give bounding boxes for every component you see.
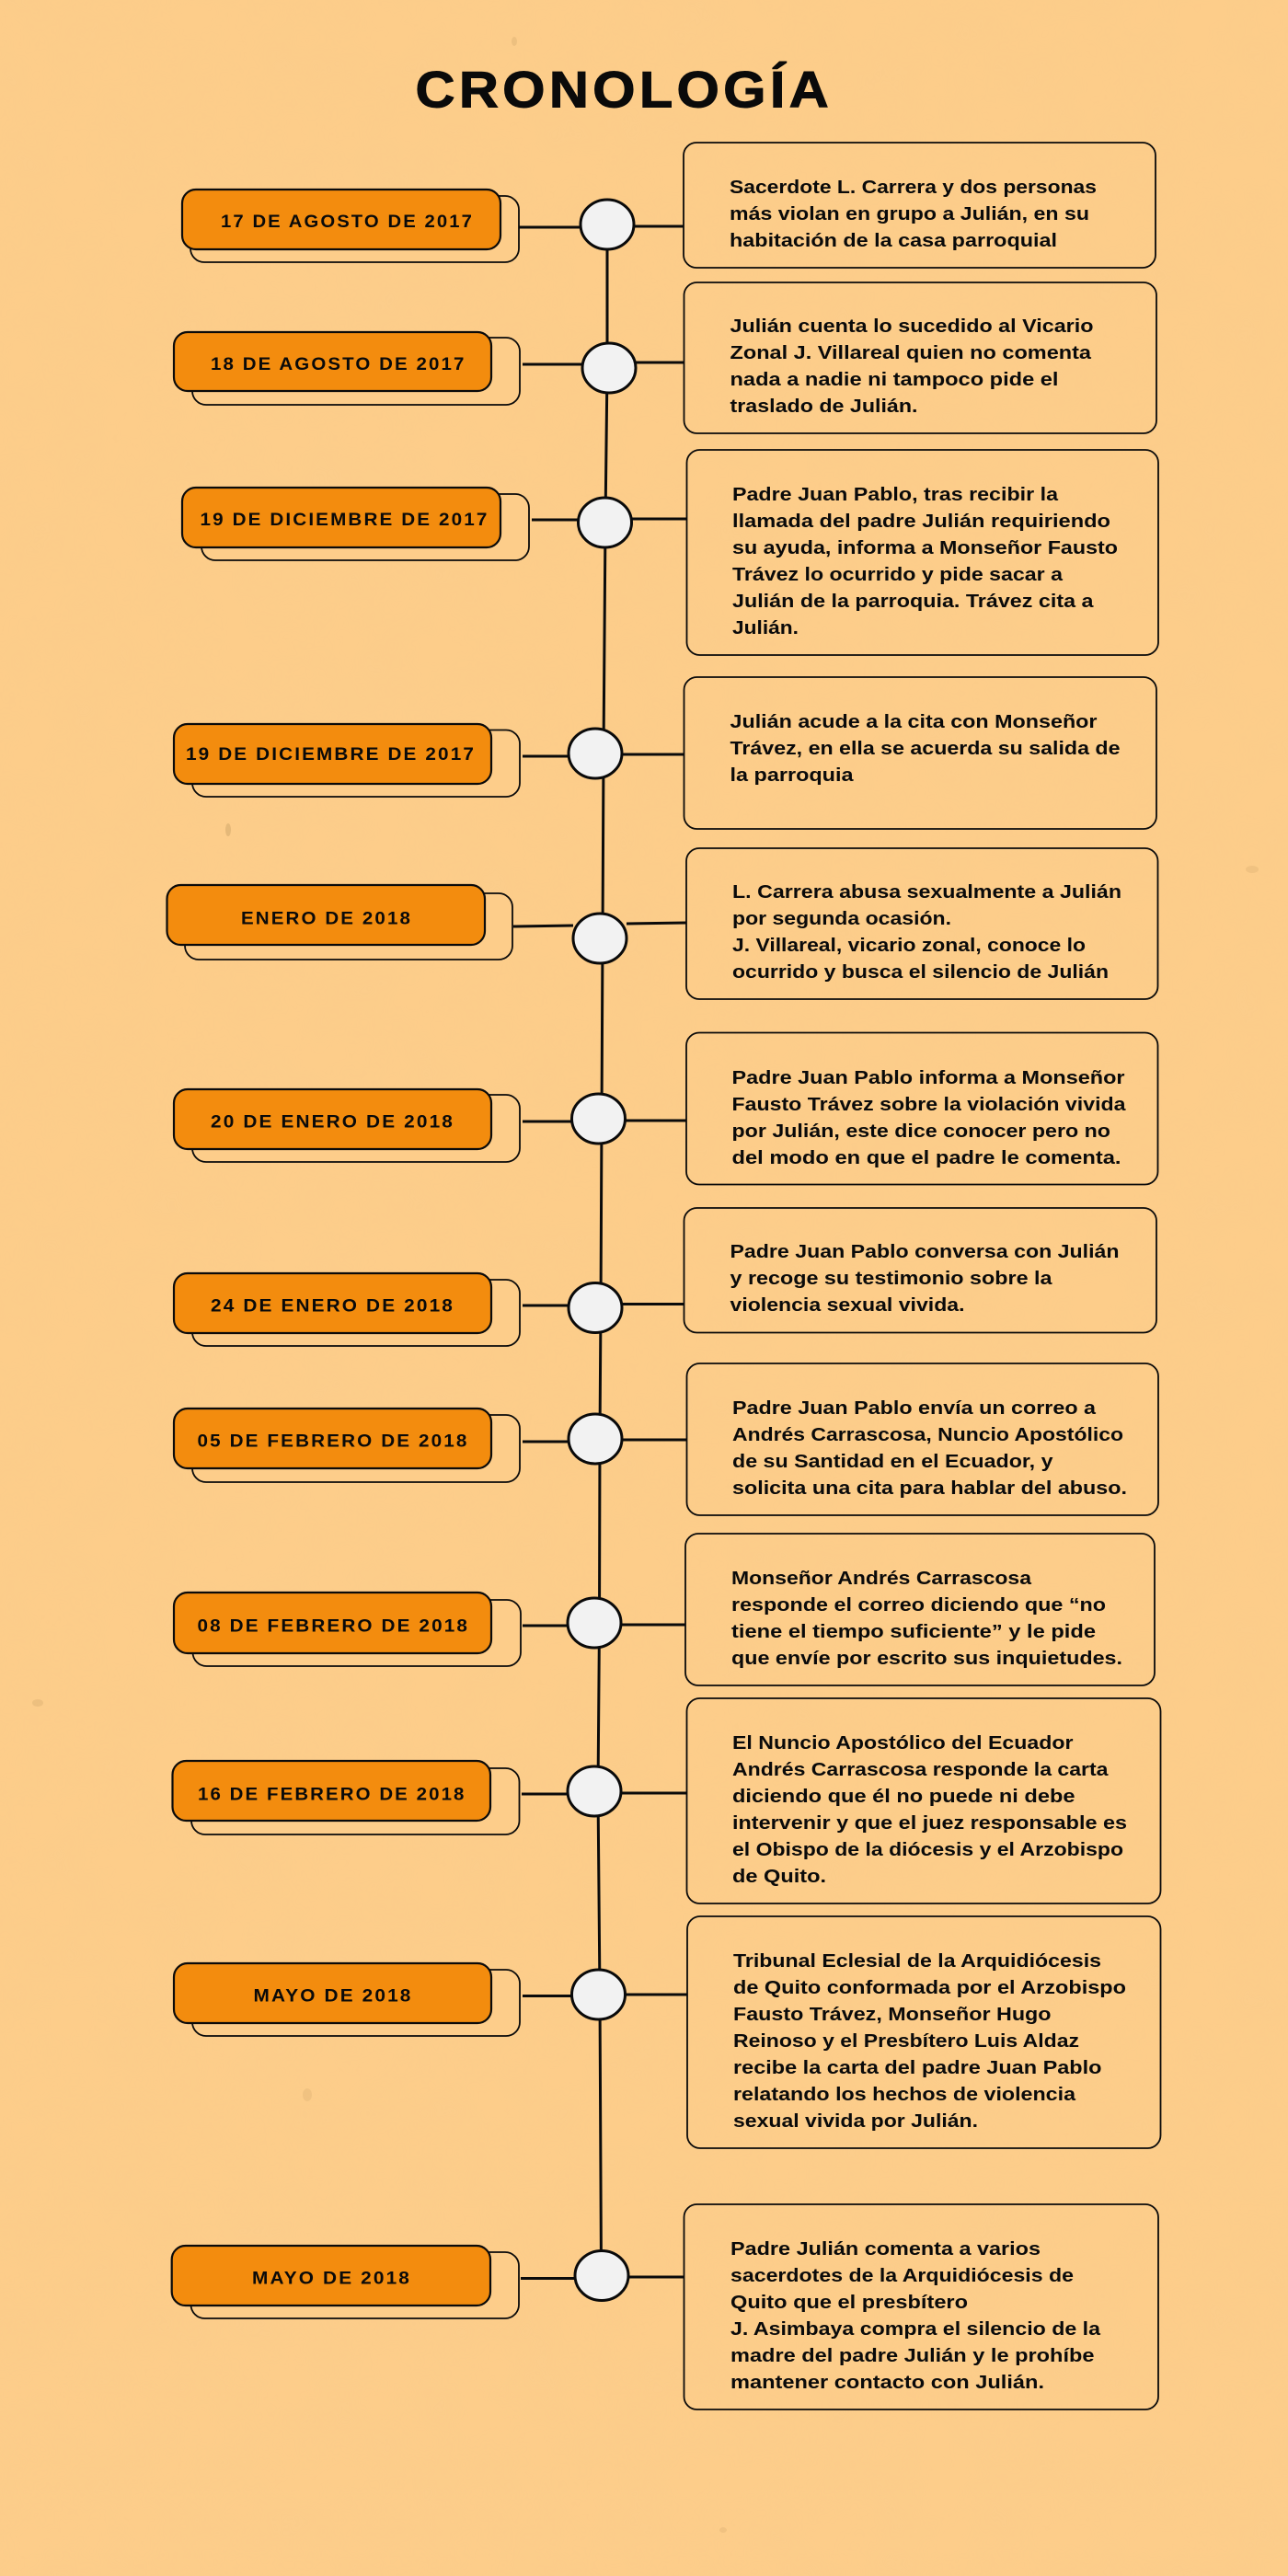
event text box: Sacerdote L. Carrera y dos personas [730,177,1097,198]
connectors [513,923,686,926]
event 9 [174,1534,1155,1685]
event text box: sexual vivida por Julián. [733,2110,978,2132]
connectors [519,226,684,227]
event text box: que envíe por escrito sus inquietudes. [731,1648,1122,1669]
event text box [684,143,1156,268]
event text box: y recoge su testimonio sobre la [730,1268,1052,1289]
date tag: 08 de febrero de 2018 [174,1593,521,1666]
node [582,343,636,393]
connectors [523,362,684,364]
event text box [684,1208,1156,1332]
event text box [686,1032,1157,1185]
connectors [523,1625,685,1626]
event 2 [174,282,1156,433]
event text box: Padre Juan Pablo, tras recibir la [732,484,1059,505]
event text box: Julián acude a la cita con Monseñor [730,711,1098,732]
event text box: más violan en grupo a Julián, en su [730,203,1089,224]
event text box: responde el correo diciendo que “no [731,1594,1106,1616]
event text box [684,282,1156,433]
event 10 [173,1698,1161,1903]
event text box: Monseñor Andrés Carrascosa [731,1568,1032,1589]
event text box: de Quito conformada por el Arzobispo [733,1977,1126,1998]
event text box [686,1363,1158,1515]
event text box: Padre Julián comenta a varios [730,2238,1041,2260]
event text box [684,677,1156,829]
event text box: llamada del padre Julián requiriendo [732,511,1110,532]
event text box: Padre Juan Pablo envía un correo a [732,1397,1097,1419]
event 3 [182,450,1158,655]
event text box: de Quito. [732,1866,826,1887]
event text box: su ayuda, informa a Monseñor Fausto [732,537,1118,558]
event text box: El Nuncio Apostólico del Ecuador [732,1732,1074,1754]
event text box: violencia sexual vivida. [730,1294,964,1316]
event text box: Quito que el presbítero [730,2292,968,2313]
event text box: Tribunal Eclesial de la Arquidiócesis [733,1950,1101,1972]
date tag: 19 de diciembre de 2017: 19 DE DICIEMBRE DE 2017 [186,744,476,765]
date tag: 19 de diciembre de 2017: 19 DE DICIEMBRE DE 2017 [201,510,489,530]
event text box: ocurrido y busca el silencio de Julián [732,961,1109,983]
date tag: 16 de febrero de 2018: 16 DE FEBRERO DE 2018 [198,1785,466,1805]
date tag: mayo de 2018 [172,2246,519,2318]
date tag: mayo de 2018: MAYO DE 2018 [254,1985,412,2006]
event text box: por Julián, este dice conocer pero no [732,1121,1110,1142]
node [568,1766,621,1816]
date tag: 18 de agosto de 2017 [174,332,520,405]
event text box: el Obispo de la diócesis y el Arzobispo [732,1839,1123,1860]
date tag: 20 de enero de 2018 [174,1089,520,1162]
node [568,1598,621,1648]
connectors [523,754,684,756]
node [578,498,631,547]
connectors [523,1995,687,1996]
event text box: mantener contacto con Julián. [730,2372,1044,2393]
date tag: 24 de enero de 2018 [174,1273,520,1346]
connectors [521,2277,684,2278]
timeline vertical line [598,224,607,2275]
event text box: Reinoso y el Presbítero Luis Aldaz [733,2030,1079,2052]
date tag: 17 de agosto de 2017: 17 DE AGOSTO DE 2017 [221,212,474,232]
date tag: 05 de febrero de 2018: 05 DE FEBRERO DE 2018 [197,1432,469,1452]
event text box: recibe la carta del padre Juan Pablo [733,2057,1102,2078]
date tag: 18 de agosto de 2017: 18 DE AGOSTO DE 2017 [211,354,466,374]
event text box: Andrés Carrascosa, Nuncio Apostólico [732,1424,1123,1445]
event text box: de su Santidad en el Ecuador, y [732,1451,1053,1472]
event text box: intervenir y que el juez responsable es [732,1812,1127,1834]
event text box: Julián cuenta lo sucedido al Vicario [730,316,1093,337]
event text box: Julián. [732,617,799,638]
event text box: del modo en que el padre le comenta. [732,1147,1121,1168]
event text box [686,450,1158,655]
date tag: enero de 2018: ENERO DE 2018 [241,909,412,929]
event text box: Fausto Trávez sobre la violación vivida [732,1094,1126,1115]
date tag: 20 de enero de 2018: 20 DE ENERO DE 2018 [211,1111,454,1132]
event text box: L. Carrera abusa sexualmente a Julián [732,881,1121,903]
event text box [686,1698,1161,1903]
title: CRONOLOGÍA [416,61,833,118]
event text box: Padre Juan Pablo conversa con Julián [730,1241,1119,1262]
node [569,1414,622,1464]
event text box: J. Villareal, vicario zonal, conoce lo [732,935,1086,956]
event text box [687,1916,1161,2148]
event text box: Fausto Trávez, Monseñor Hugo [733,2004,1051,2025]
event text box: relatando los hechos de violencia [733,2084,1076,2105]
event 6 [174,1032,1157,1185]
node [569,1282,622,1332]
node [569,729,622,778]
event 4 [174,677,1156,829]
event 5 [167,848,1157,999]
event text box: solicita una cita para hablar del abuso. [732,1478,1127,1499]
node [572,1094,626,1144]
event text box: traslado de Julián. [730,396,918,417]
event text box: Padre Juan Pablo informa a Monseñor [732,1067,1125,1088]
node [581,200,634,249]
event text box: diciendo que él no puede ni debe [732,1786,1075,1807]
event text box: J. Asimbaya compra el silencio de la [730,2318,1101,2340]
event text box: Andrés Carrascosa responde la carta [732,1759,1109,1780]
date tag: enero de 2018 [167,885,512,960]
date tag: mayo de 2018 [174,1963,520,2036]
date tag: 19 de diciembre de 2017 [182,488,529,560]
event 12 [172,2204,1158,2409]
connectors [522,1793,686,1794]
event text box: Trávez, en ella se acuerda su salida de [730,738,1121,759]
event text box [686,848,1157,999]
connectors [532,519,686,520]
date tag: 05 de febrero de 2018 [174,1409,520,1482]
node [572,1970,626,2019]
event text box: sacerdotes de la Arquidiócesis de [730,2265,1074,2286]
event text box: la parroquia [730,765,854,786]
event text box: Julián de la parroquia. Trávez cita a [732,591,1094,612]
date tag: 24 de enero de 2018: 24 DE ENERO DE 2018 [211,1295,454,1316]
event 7 [174,1208,1156,1346]
date tag: 17 de agosto de 2017 [182,190,519,262]
event 1 [182,143,1156,268]
event text box: nada a nadie ni tampoco pide el [730,369,1058,390]
event text box [684,2204,1158,2409]
event text box: habitación de la casa parroquial [730,230,1057,251]
node [573,914,627,963]
event text box: tiene el tiempo suficiente” y le pide [731,1621,1096,1642]
event 8 [174,1363,1158,1515]
date tag: 08 de febrero de 2018: 08 DE FEBRERO DE 2018 [197,1616,469,1636]
date tag: mayo de 2018: MAYO DE 2018 [252,2269,411,2289]
date tag: 16 de febrero de 2018 [173,1761,519,1834]
event text box [685,1534,1155,1685]
event text box: madre del padre Julián y le prohíbe [730,2345,1095,2366]
event 11 [174,1916,1161,2148]
event text box: por segunda ocasión. [732,908,951,929]
date tag: 19 de diciembre de 2017 [174,724,520,797]
event text box: Zonal J. Villareal quien no comenta [730,342,1092,363]
connectors [523,1440,686,1442]
node [575,2250,628,2300]
event text box: Trávez lo ocurrido y pide sacar a [732,564,1064,585]
